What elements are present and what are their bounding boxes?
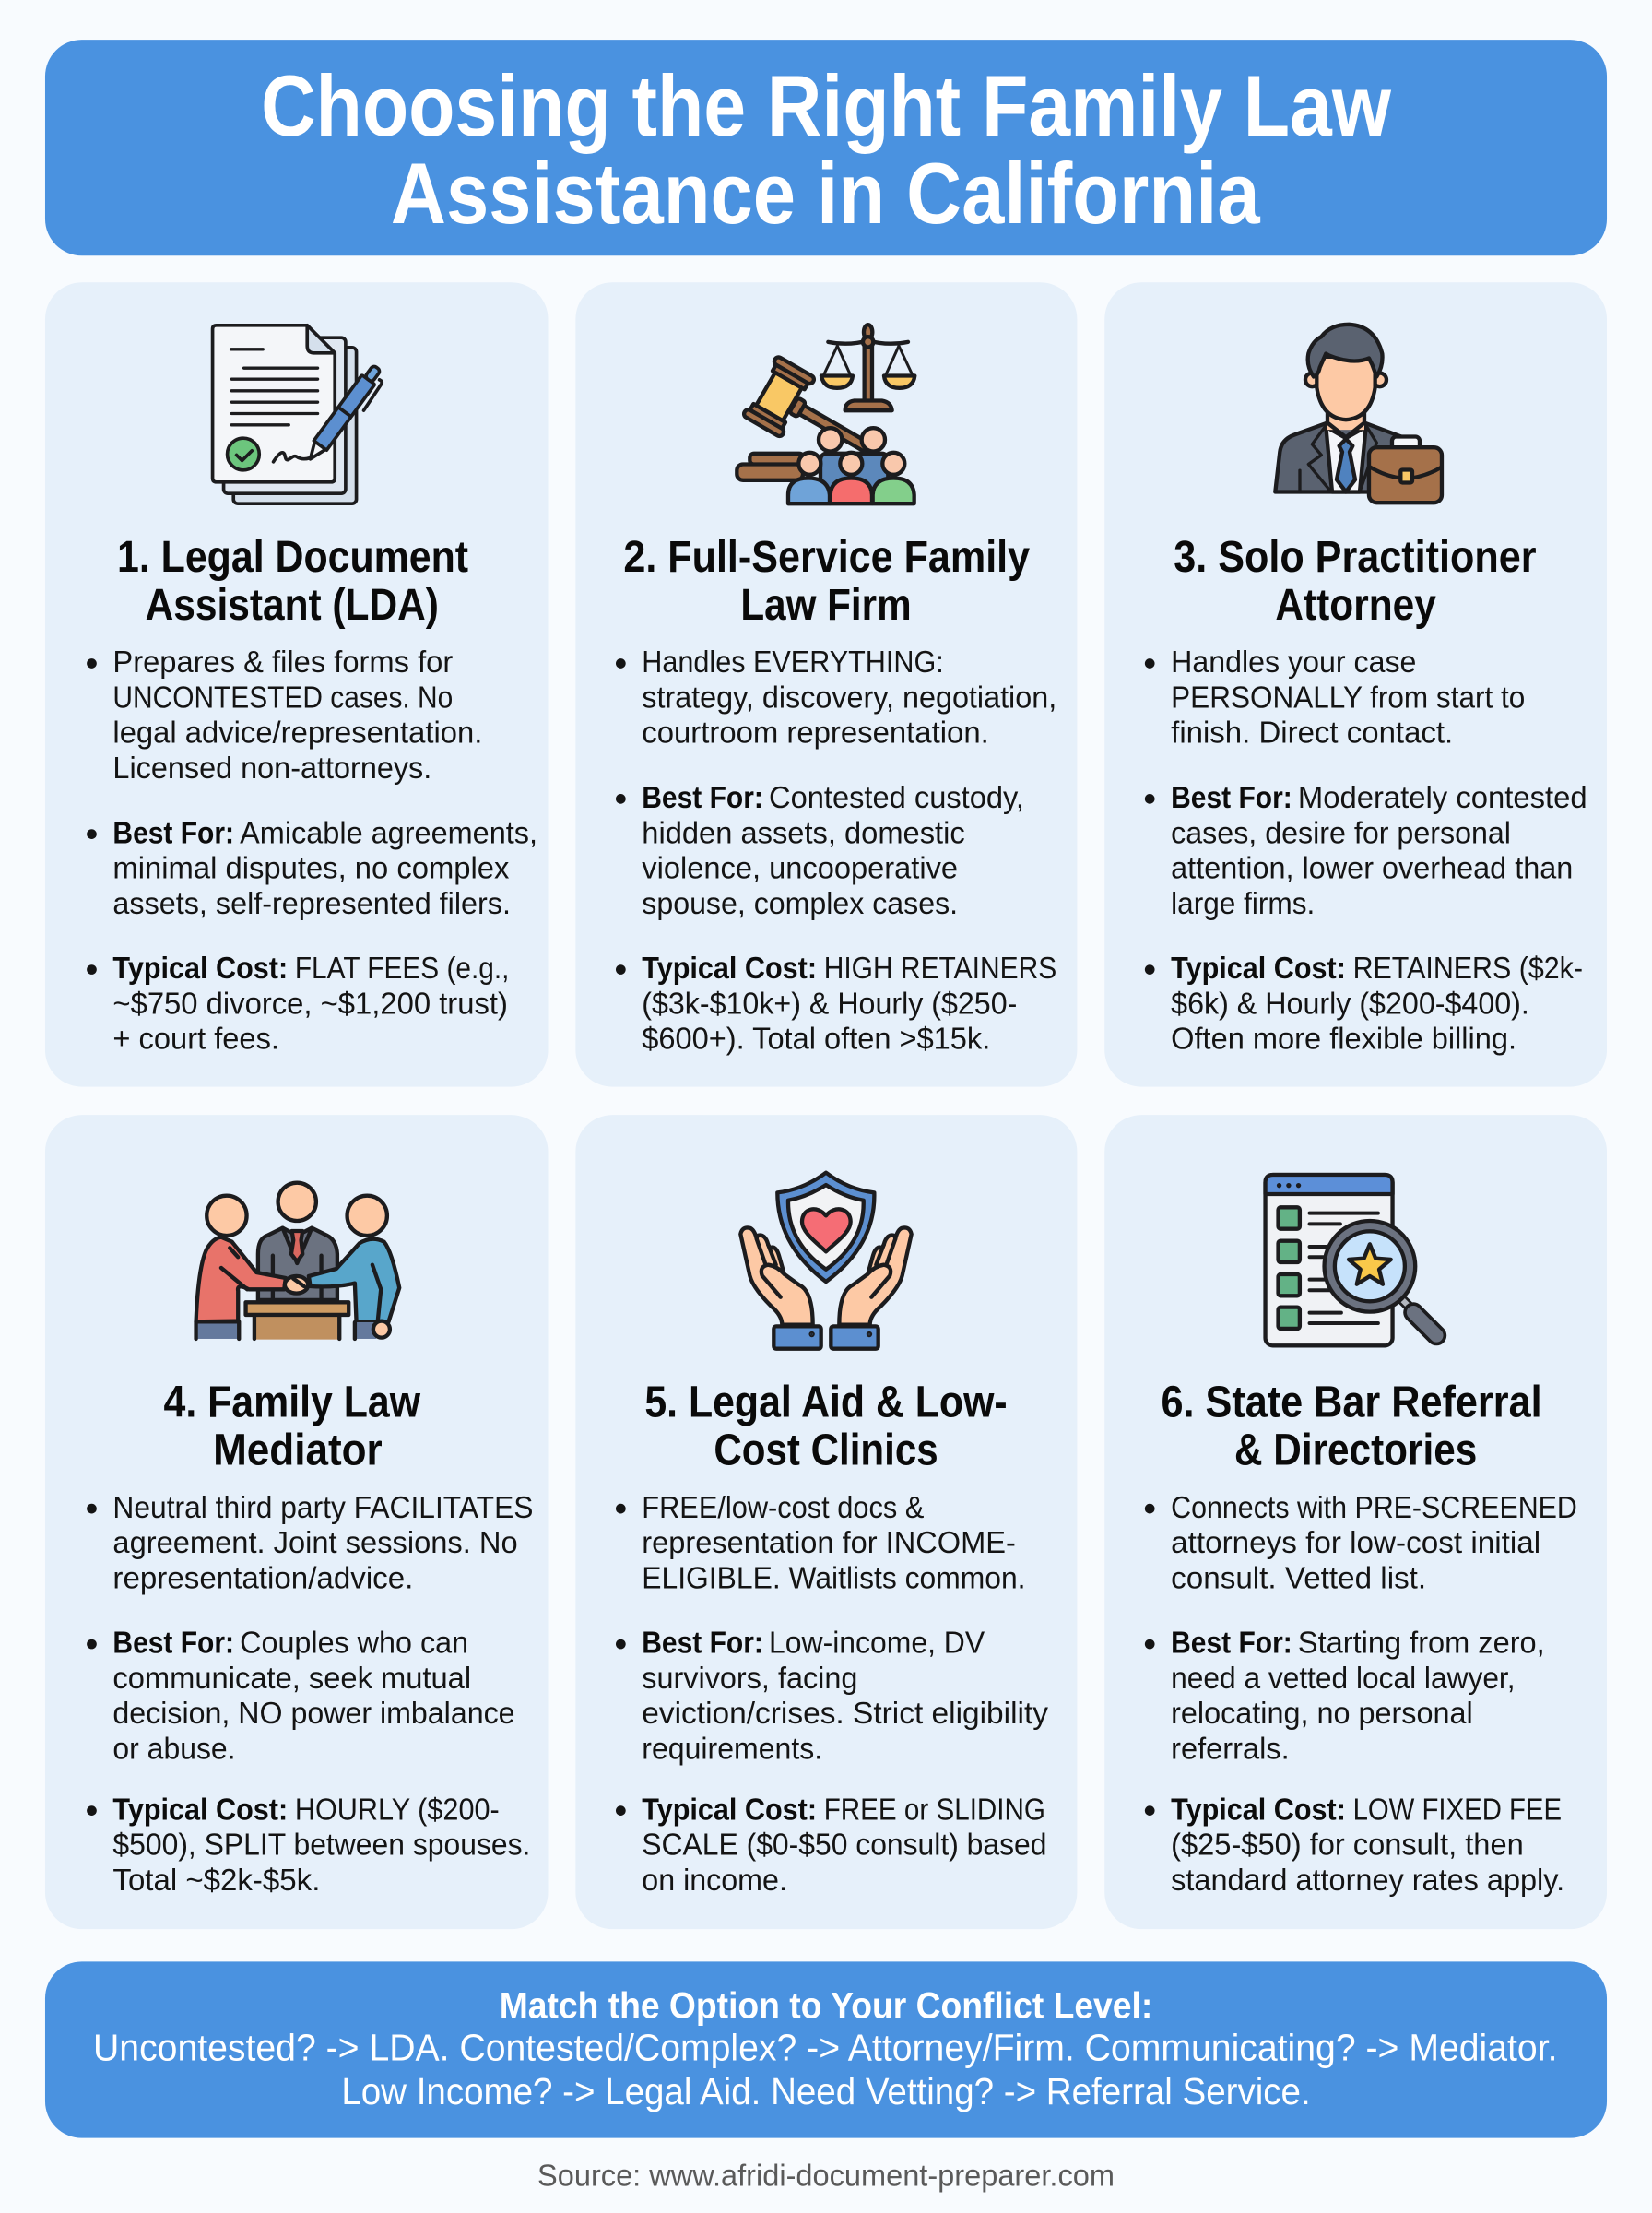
bullet: best for: or abuse. — [112, 1732, 236, 1766]
bullet: best for: referrals. — [1171, 1732, 1290, 1766]
heading — [623, 532, 1030, 630]
bullet: what it does: Prepares & files forms for — [112, 645, 453, 680]
bullet: what it does: FREE/low-cost docs & — [642, 1491, 924, 1525]
panel: legal aid and low-cost clinics — [575, 1115, 1077, 1929]
bullet: typical cost: RETAINERS ($2k- — [1353, 952, 1583, 986]
bullet: best for — [87, 816, 537, 921]
bullet: what it does: Licensed non-attorneys. — [112, 751, 431, 786]
bullet: typical cost: Typical Cost: — [112, 952, 288, 986]
bullet: typical cost: standard attorney rates apply. — [1171, 1864, 1564, 1898]
bullet: best for — [1145, 781, 1587, 921]
summary banner: Uncontested? -> LDA. Contested/Complex? -> Attorney/Firm. Communicating? -> Mediator. — [93, 2026, 1557, 2068]
panel: full-service family law firm — [575, 282, 1077, 1087]
bullet: what it does: consult. Vetted list. — [1171, 1561, 1426, 1595]
heading: 1. Legal Document — [117, 532, 468, 582]
bullet: what it does: attorneys for low-cost initial — [1171, 1526, 1540, 1560]
bullet: typical cost: FLAT FEES (e.g., — [295, 952, 509, 986]
bullet: best for: Amicable agreements, — [240, 816, 537, 850]
bullet: what it does — [1145, 1491, 1577, 1595]
bullet: typical cost: $6k) & Hourly ($200-$400). — [1171, 987, 1529, 1021]
bullet: best for — [1145, 1627, 1545, 1766]
bullet: best for: requirements. — [642, 1732, 822, 1766]
bullet: what it does: agreement. Joint sessions. No — [112, 1526, 518, 1560]
bullet: best for: attention, lower overhead than — [1171, 852, 1573, 886]
heading: 4. Family Law — [164, 1378, 420, 1427]
heading: Assistant (LDA) — [146, 580, 439, 630]
bullet: best for: Couples who can — [240, 1627, 468, 1661]
bullet: typical cost: $500), SPLIT between spouses. — [112, 1828, 530, 1863]
title banner: Assistance in California — [391, 146, 1261, 242]
bullet: what it does — [616, 1491, 1026, 1595]
bullet: best for: Best For: — [642, 1627, 763, 1661]
bullet: typical cost: Typical Cost: — [1171, 1793, 1346, 1827]
summary banner: Match the Option to Your Conflict Level: — [500, 1986, 1152, 2027]
bullet: typical cost: ~$750 divorce, ~$1,200 trust) — [112, 987, 508, 1021]
bullet: best for: minimal disputes, no complex — [112, 852, 510, 886]
bullet: what it does — [87, 1491, 533, 1595]
panel: state bar referral and directories — [1104, 1115, 1607, 1929]
bullet: typical cost: Typical Cost: — [112, 1793, 288, 1827]
bullet: typical cost — [1145, 1793, 1564, 1898]
icon: mediator and handshake — [196, 1183, 399, 1340]
bullet: best for: communicate, seek mutual — [112, 1662, 471, 1696]
heading: 2. Full-Service Family — [623, 532, 1030, 582]
bullet: what it does: Neutral third party FACILITATES — [112, 1491, 533, 1525]
bullet: typical cost — [1145, 952, 1583, 1057]
bullet: best for: Best For: — [642, 781, 763, 815]
bullet: best for: large firms. — [1171, 887, 1315, 921]
title banner — [45, 40, 1607, 255]
heading: Attorney — [1275, 580, 1436, 630]
bullet: typical cost — [616, 952, 1056, 1057]
icon: gavel, scales and clients — [737, 325, 914, 503]
icon: signed document and pen — [213, 325, 384, 503]
bullet: typical cost: Often more flexible billing. — [1171, 1023, 1516, 1057]
bullet: typical cost: ($3k-$10k+) & Hourly ($250- — [642, 987, 1017, 1021]
bullet: best for — [616, 781, 1024, 921]
bullet: what it does: Connects with PRE-SCREENED — [1171, 1491, 1577, 1525]
bullet: best for: relocating, no personal — [1171, 1697, 1473, 1731]
bullet: what it does: courtroom representation. — [642, 716, 989, 751]
heading — [1174, 532, 1537, 630]
bullet: what it does — [616, 645, 1056, 751]
heading: Mediator — [213, 1426, 383, 1475]
bullet: best for: Contested custody, — [769, 781, 1024, 815]
heading — [164, 1378, 420, 1475]
bullet: best for: Starting from zero, — [1298, 1627, 1545, 1661]
bullet: typical cost: Typical Cost: — [642, 952, 817, 986]
bullet: best for: Best For: — [1171, 1627, 1292, 1661]
bullet: typical cost — [87, 952, 509, 1057]
panel: legal document assistant — [45, 282, 549, 1087]
summary banner: Low Income? -> Legal Aid. Need Vetting? -> Referral Service. — [341, 2070, 1311, 2112]
bullet: typical cost: + court fees. — [112, 1023, 279, 1057]
bullet: what it does — [1145, 645, 1525, 751]
bullet: typical cost: SCALE ($0-$50 consult) based — [642, 1828, 1046, 1863]
bullet: what it does: representation/advice. — [112, 1561, 413, 1595]
bullet: typical cost: Typical Cost: — [642, 1793, 817, 1827]
bullet: typical cost: Typical Cost: — [1171, 952, 1346, 986]
icon: directory with magnifier and star — [1266, 1175, 1436, 1345]
bullet: typical cost: $600+). Total often >$15k. — [642, 1023, 990, 1057]
bullet: what it does: representation for INCOME- — [642, 1526, 1016, 1560]
bullet: typical cost — [87, 1793, 530, 1898]
bullet: best for: assets, self-represented filers. — [112, 887, 511, 921]
bullet: typical cost: on income. — [642, 1864, 787, 1898]
heading: 3. Solo Practitioner — [1174, 532, 1537, 582]
heading: & Directories — [1234, 1426, 1477, 1475]
bullet: best for: need a vetted local lawyer, — [1171, 1662, 1516, 1696]
bullet: best for: hidden assets, domestic — [642, 816, 965, 850]
summary banner — [45, 1961, 1607, 2138]
bullet: typical cost: FREE or SLIDING — [824, 1793, 1045, 1827]
heading — [644, 1378, 1008, 1475]
bullet: best for: decision, NO power imbalance — [112, 1697, 515, 1731]
bullet: best for: cases, desire for personal — [1171, 816, 1511, 850]
bullet: best for: Best For: — [1171, 781, 1292, 815]
heading — [117, 532, 468, 630]
heading: Cost Clinics — [714, 1426, 938, 1475]
bullet: best for — [616, 1627, 1048, 1766]
bullet: what it does: ELIGIBLE. Waitlists common. — [642, 1561, 1026, 1595]
bullet: what it does: strategy, discovery, negotiation, — [642, 680, 1056, 715]
bullet: best for: Low-income, DV — [769, 1627, 985, 1661]
heading — [1161, 1378, 1542, 1475]
bullet: best for: Moderately contested — [1298, 781, 1587, 815]
icon: attorney with briefcase — [1275, 325, 1442, 503]
bullet: what it does: finish. Direct contact. — [1171, 716, 1453, 751]
source line: Source: www.afridi-document-preparer.com — [537, 2160, 1115, 2194]
bullet: typical cost: HIGH RETAINERS — [824, 952, 1056, 986]
bullet: typical cost: ($25-$50) for consult, then — [1171, 1828, 1524, 1863]
bullet: best for: Best For: — [112, 1627, 234, 1661]
bullet: what it does: Handles your case — [1171, 645, 1416, 680]
heading: 5. Legal Aid & Low- — [644, 1378, 1008, 1427]
bullet: what it does: Handles EVERYTHING: — [642, 645, 944, 680]
bullet: best for — [87, 1627, 515, 1766]
bullet: best for: Best For: — [112, 816, 234, 850]
bullet: best for: eviction/crises. Strict eligibility — [642, 1697, 1048, 1731]
bullet: what it does — [87, 645, 482, 786]
heading: Law Firm — [740, 580, 912, 630]
bullet: what it does: legal advice/representation. — [112, 716, 482, 751]
panel: solo practitioner attorney — [1104, 282, 1607, 1087]
panel: family law mediator — [45, 1115, 549, 1929]
bullet: best for: spouse, complex cases. — [642, 887, 958, 921]
bullet: what it does: UNCONTESTED cases. No — [112, 680, 453, 715]
bullet: typical cost: Total ~$2k-$5k. — [112, 1864, 320, 1898]
bullet: typical cost — [616, 1793, 1046, 1898]
bullet: typical cost: LOW FIXED FEE — [1353, 1793, 1562, 1827]
bullet: best for: survivors, facing — [642, 1662, 857, 1696]
icon: hands holding shield with heart — [740, 1173, 912, 1349]
bullet: what it does: PERSONALLY from start to — [1171, 680, 1525, 715]
heading: 6. State Bar Referral — [1161, 1378, 1542, 1427]
bullet: typical cost: HOURLY ($200- — [295, 1793, 500, 1827]
title banner: Choosing the Right Family Law — [261, 58, 1391, 154]
bullet: best for: violence, uncooperative — [642, 852, 958, 886]
